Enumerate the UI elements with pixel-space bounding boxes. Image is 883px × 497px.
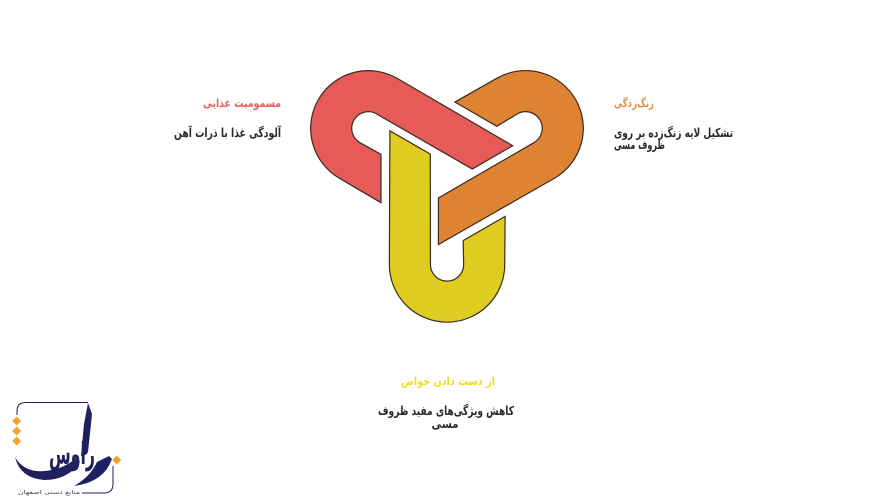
logo frame <box>17 402 113 493</box>
text block: food poisoning <box>174 96 282 140</box>
segment: orange rust link <box>389 41 604 282</box>
segment: yellow loss of properties link <box>325 102 540 343</box>
text block: loss of properties <box>378 374 515 431</box>
description: food poisoning: آلودگی غذا با ذرات آهن <box>174 125 282 140</box>
description line 2: loss of properties: مسی <box>432 416 458 431</box>
heading: food poisoning: مسمومیت غذایی <box>203 96 281 111</box>
text block: rusting <box>614 96 733 152</box>
heading: loss of properties: از دست دادن خواص <box>401 374 495 389</box>
description line 1: loss of properties: کاهش ویژگی‌های مفید ظروف <box>378 403 515 418</box>
logo <box>12 402 121 496</box>
logo caption: منابع دستی اصفهان <box>18 490 80 496</box>
description line 2: rusting: ظروف مسی <box>614 137 665 152</box>
logo diamonds <box>12 416 121 464</box>
description line 1: rusting: تشکیل لایه زنگ‌زده بر روی <box>614 125 733 140</box>
segment: red food poisoning link <box>311 71 513 203</box>
logo wordmark: راوس <box>49 437 95 472</box>
triad knot diagram <box>311 41 604 343</box>
logo calligraphy flourishes <box>15 403 112 486</box>
heading: rusting: زنگ‌زدگی <box>614 96 654 110</box>
